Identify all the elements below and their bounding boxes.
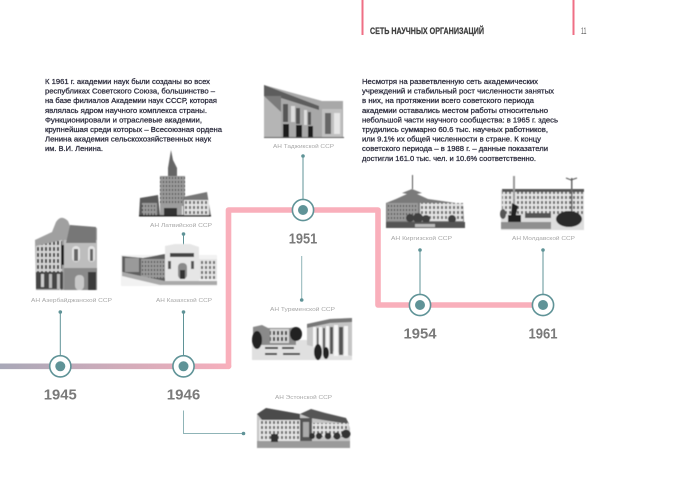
year 1961: 1961 — [528, 326, 558, 342]
page number: 11 — [581, 26, 586, 36]
text block: left paragraph: республиках Советского Союза, большинство – — [45, 87, 216, 96]
text block: left paragraph: им. В.И. Ленина. — [45, 144, 103, 153]
text block: left paragraph: являлась ядром научного комплекса страны. — [45, 106, 207, 115]
timeline line — [0, 210, 543, 366]
text block: right paragraph: академии оставались местом работы относительно — [362, 106, 548, 115]
label: Azerbaijan: АН Азербайджанской ССР — [31, 297, 112, 304]
node: 1946 — [173, 356, 194, 377]
text block: right paragraph: или 9.1% их общей численности в стране. К концу — [362, 135, 541, 144]
photo: Kyrgyzstan academy building — [386, 175, 465, 228]
text block: left paragraph — [45, 77, 223, 153]
photo: Moldova academy building — [500, 176, 584, 230]
node: 1945 — [50, 356, 71, 377]
text block: right paragraph: достигли 161.0 тыс. чел. и 10.6% соответственно. — [362, 154, 536, 163]
text block: right paragraph — [362, 77, 558, 163]
photo: Kazakhstan academy building — [121, 244, 217, 286]
year 1946: 1946 — [167, 388, 200, 404]
text block: left paragraph: на базе филиалов Академии наук СССР, которая — [45, 96, 217, 105]
text block: left paragraph: крупнейшая среди которых – Всесоюзная ордена — [45, 125, 223, 134]
label: Tajikistan: АН Таджикской ССР — [273, 143, 334, 150]
header title: СЕТЬ НАУЧНЫХ ОРГАНИЗАЦИЙ — [370, 25, 484, 37]
year 1945: 1945 — [44, 388, 77, 404]
photo: Estonia academy building — [257, 408, 350, 448]
label: Latvia: АН Латвийской ССР — [150, 222, 212, 229]
label: Estonia: АН Эстонской ССР — [275, 394, 332, 401]
photo: Azerbaijan academy building — [35, 218, 97, 290]
text block: right paragraph: учреждений и стабильный рост численности занятых — [362, 87, 554, 96]
text block: left paragraph: К 1961 г. академии наук были созданы во всех — [45, 77, 210, 86]
node: 1951 — [292, 199, 314, 221]
connectors — [58, 154, 545, 435]
year 1954: 1954 — [404, 326, 436, 342]
label: Turkmenistan: АН Туркменской ССР — [270, 306, 335, 313]
text block: left paragraph: Ленина академия сельскохозяйственных наук — [45, 135, 212, 144]
label: Moldova: АН Молдавской ССР — [512, 235, 575, 242]
text block: right paragraph: трудились суммарно 60.6 тыс. научных работников, — [362, 125, 548, 134]
text block: right paragraph: советского периода – в 1988 г. – данные показатели — [362, 144, 548, 153]
year 1951: 1951 — [289, 232, 317, 248]
label: Kyrgyzstan: АН Киргизской ССР — [391, 235, 452, 242]
node: 1954 — [409, 294, 431, 316]
photo: Latvia academy tower — [139, 150, 211, 216]
text block: right paragraph: в них, на протяжении всего советского периода — [362, 96, 535, 105]
node: 1961 — [532, 294, 554, 316]
photo: Tajikistan academy building — [264, 85, 344, 138]
text block: right paragraph: Несмотря на разветвленную сеть академических — [362, 77, 538, 86]
label: Kazakhstan: АН Казахской ССР — [156, 297, 212, 304]
text block: right paragraph: небольшой части научного сообщества: в 1965 г. здесь — [362, 115, 558, 124]
text block: left paragraph: Функционировали и отраслевые академии, — [45, 115, 202, 124]
photo: Turkmenistan academy building — [252, 318, 352, 360]
